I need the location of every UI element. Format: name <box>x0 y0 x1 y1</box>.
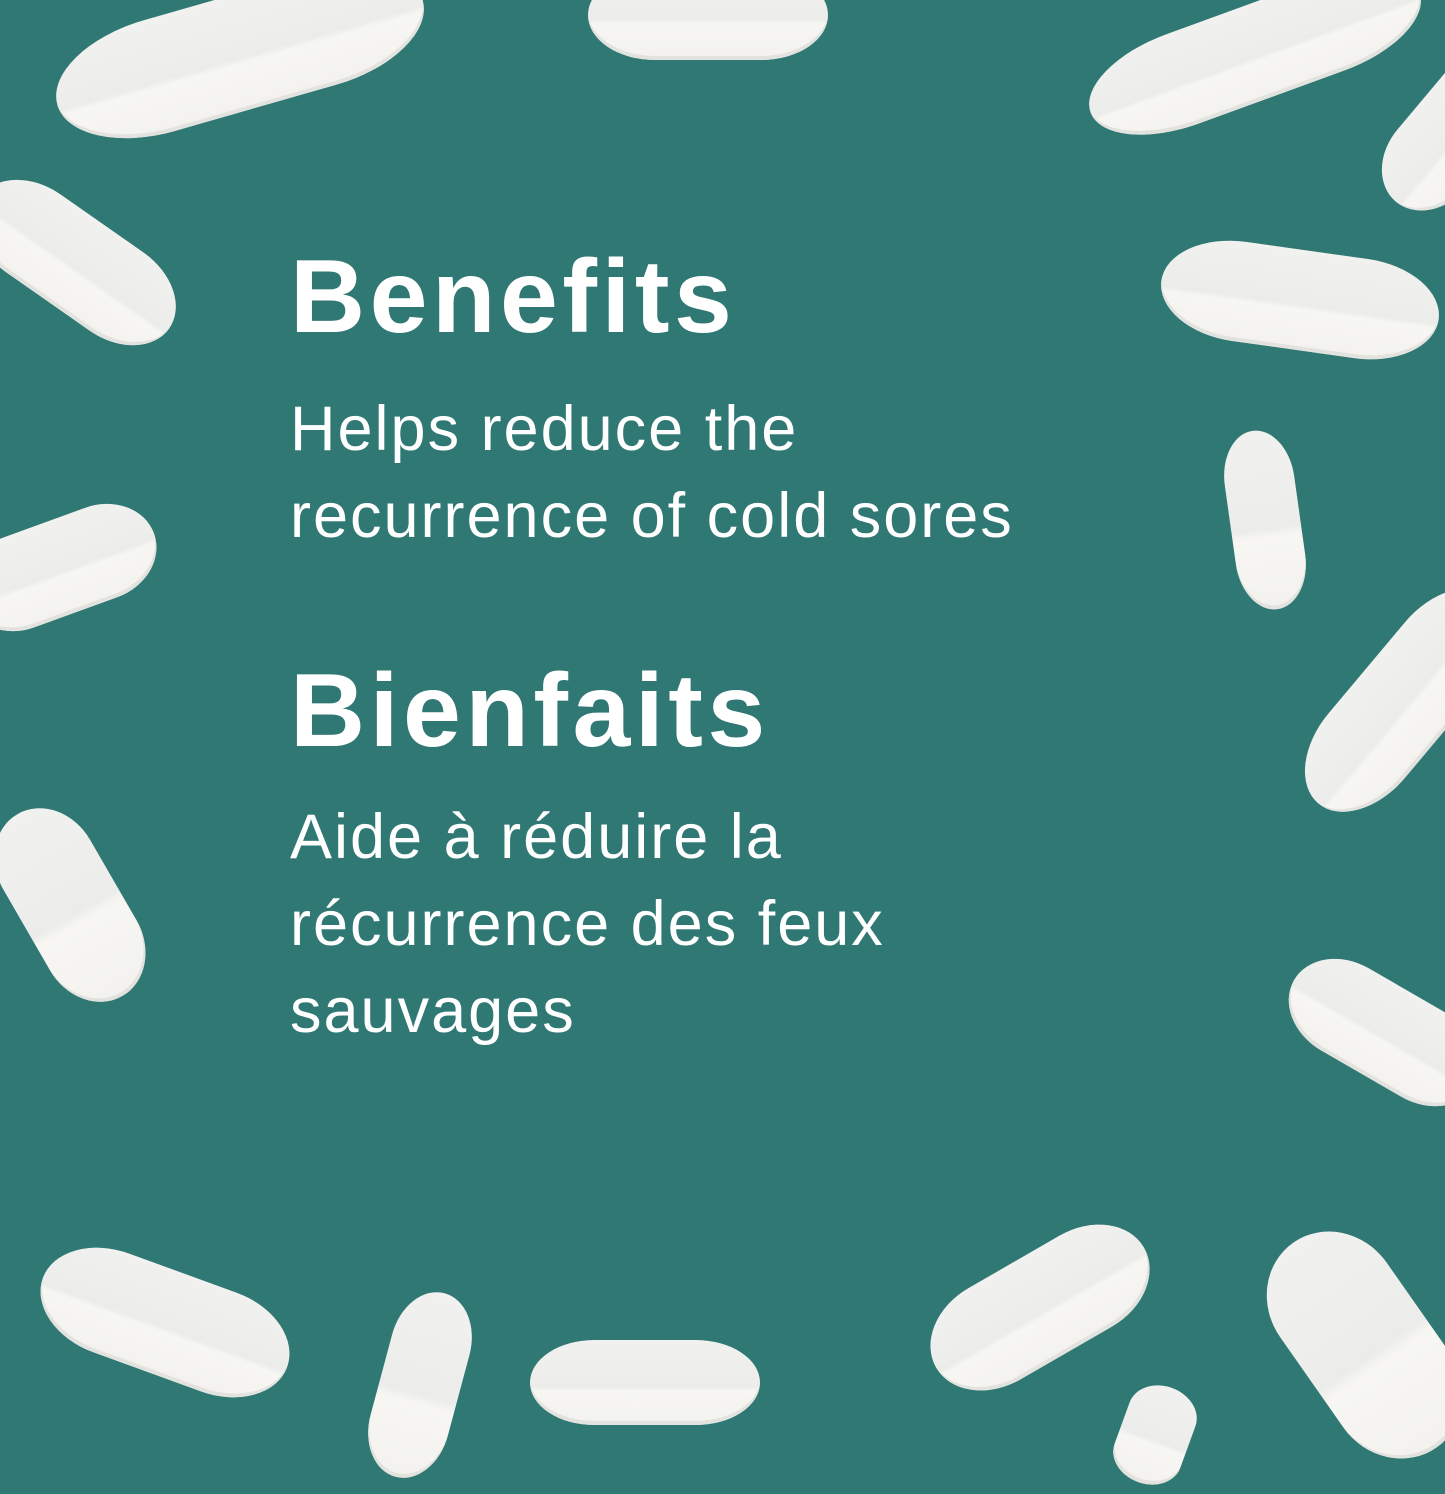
pill: right middle <box>1280 564 1445 836</box>
heading: Benefits: Benefits <box>290 239 736 355</box>
text: French benefit: Aide à réduire la <box>290 802 783 872</box>
pill: left lower <box>0 789 166 1021</box>
pill: right edge top <box>1361 19 1445 231</box>
pill: left middle <box>0 489 170 646</box>
text: English benefit: recurrence of cold sores <box>290 481 1014 551</box>
pill: bottom right corner <box>1240 1205 1445 1485</box>
pill: bottom left <box>25 1229 305 1416</box>
pill: bottom small <box>1105 1376 1205 1494</box>
pill: top right <box>1074 0 1436 157</box>
text: French benefit: sauvages <box>290 976 576 1046</box>
text: French benefit <box>290 802 885 1046</box>
pill: top left <box>42 0 438 160</box>
text: English benefit: Helps reduce the <box>290 394 798 464</box>
pill: right vertical <box>1218 426 1312 614</box>
pill: top center <box>588 0 828 60</box>
pill: bottom center <box>530 1340 760 1425</box>
pill: bottom right <box>910 1202 1170 1413</box>
text: French benefit: récurrence des feux <box>290 889 885 959</box>
text: English benefit <box>290 394 1014 551</box>
pill: right lower <box>1270 939 1445 1126</box>
pill: right upper <box>1154 231 1445 369</box>
heading: Bienfaits: Bienfaits <box>290 653 770 769</box>
pill: bottom vertical <box>357 1283 483 1487</box>
pill: left upper <box>0 158 196 367</box>
